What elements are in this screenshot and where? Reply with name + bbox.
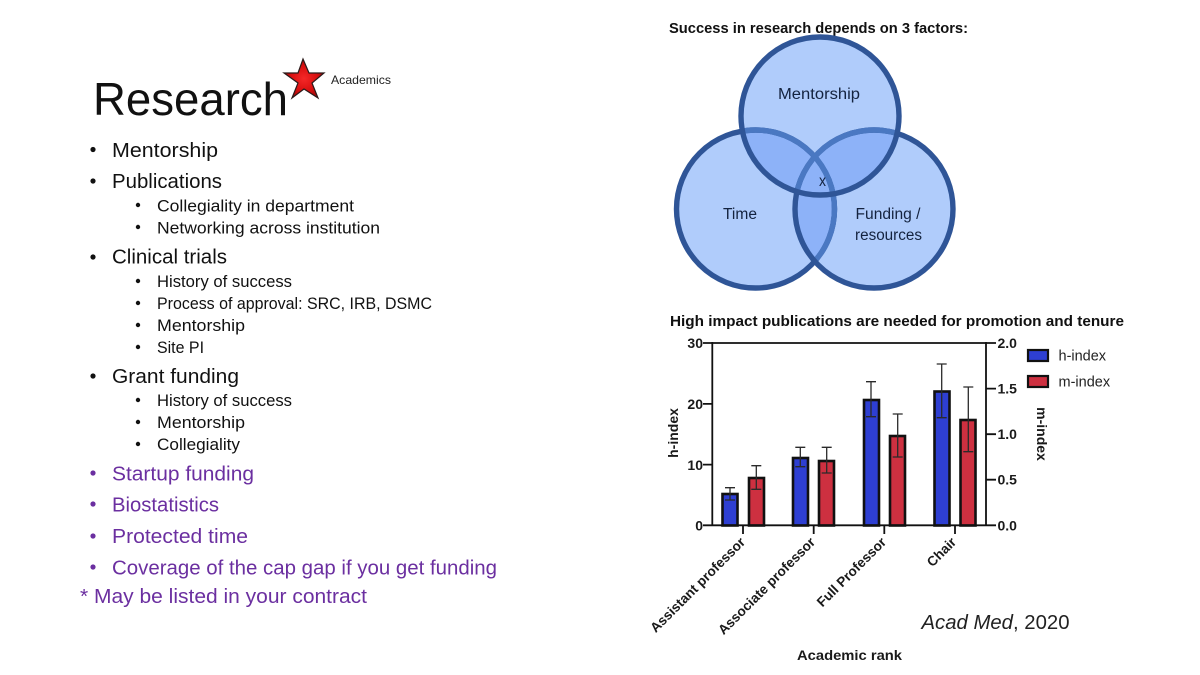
contract items in purple bbox=[80, 464, 497, 608]
bullet: clinical trials: Process of approval: SRC, IRB, DSMC bbox=[157, 295, 432, 313]
label: funding / resources: resources bbox=[855, 227, 922, 244]
category labels: Full Professor bbox=[814, 534, 890, 610]
bullet: grant funding: Grant funding bbox=[112, 366, 239, 388]
right axis labels bbox=[998, 335, 1017, 534]
venn diagram bbox=[676, 37, 953, 288]
heading: chart: High impact publications are needed for promotion and tenure bbox=[670, 313, 1124, 330]
bullet: publications: Networking across institution bbox=[157, 220, 380, 238]
category labels: Associate professor bbox=[715, 534, 819, 638]
right axis labels: 0.0 bbox=[998, 518, 1017, 534]
left axis labels: 20 bbox=[687, 396, 703, 412]
bullet: mentorship: Mentorship bbox=[112, 140, 218, 162]
right axis labels: 2.0 bbox=[998, 335, 1017, 351]
bullet: publications: Collegiality in department bbox=[157, 198, 354, 216]
bullet: publications bbox=[90, 171, 380, 238]
contract items in purple: * May be listed in your contract bbox=[80, 586, 367, 608]
left axis labels bbox=[687, 335, 703, 534]
label: mentorship: Mentorship bbox=[778, 86, 860, 103]
bullet: grant funding: Mentorship bbox=[157, 414, 245, 432]
category labels: Chair bbox=[924, 534, 960, 570]
bullet: grant funding bbox=[90, 366, 292, 454]
label: x: x bbox=[819, 173, 826, 190]
icon: red star bbox=[284, 59, 324, 98]
h-index bars bbox=[722, 392, 950, 526]
left axis labels: 0 bbox=[695, 518, 703, 534]
bullet: clinical trials: Site PI bbox=[157, 339, 204, 357]
error bars bbox=[725, 364, 973, 500]
contract items in purple: Protected time bbox=[112, 526, 248, 548]
bullet: grant funding: Collegiality bbox=[157, 436, 241, 454]
category labels bbox=[647, 534, 960, 638]
y axis title: h-index: h-index bbox=[665, 408, 681, 458]
left axis labels: 10 bbox=[687, 457, 703, 473]
bullet: clinical trials: Mentorship bbox=[157, 317, 245, 335]
subtitle: academics: Academics bbox=[331, 73, 391, 87]
label: time: Time bbox=[723, 206, 757, 223]
axes bbox=[703, 342, 996, 534]
heading: venn: Success in research depends on 3 factors: bbox=[669, 20, 968, 37]
y axis title: m-index: m-index bbox=[1034, 407, 1050, 461]
right axis labels: 0.5 bbox=[998, 472, 1017, 488]
right axis labels: 1.0 bbox=[998, 426, 1017, 442]
contract items in purple: Biostatistics bbox=[112, 494, 219, 516]
legend: h-index bbox=[1058, 348, 1107, 364]
citation: Acad Med, 2020 bbox=[920, 612, 1070, 634]
contract items in purple: Startup funding bbox=[112, 464, 254, 486]
left axis labels: 30 bbox=[687, 335, 703, 351]
contract items in purple: Coverage of the cap gap if you get funding bbox=[112, 558, 497, 580]
legend bbox=[1028, 348, 1111, 390]
bullet: clinical trials bbox=[90, 246, 432, 357]
bullet: clinical trials: History of success bbox=[157, 273, 292, 291]
bullet: clinical trials: Clinical trials bbox=[112, 246, 227, 268]
title: Research bbox=[93, 73, 288, 125]
label: funding / resources: Funding / bbox=[856, 206, 921, 223]
legend: m-index bbox=[1058, 374, 1111, 390]
bullet: grant funding: History of success bbox=[157, 392, 292, 410]
x axis title: Academic rank bbox=[797, 647, 902, 663]
bar chart bbox=[647, 335, 1111, 663]
panel: research list bbox=[80, 59, 497, 608]
bullet: publications: Publications bbox=[112, 171, 222, 193]
m-index bars bbox=[749, 420, 976, 526]
right axis labels: 1.5 bbox=[998, 380, 1017, 396]
label: funding / resources bbox=[855, 206, 922, 244]
category labels: Assistant professor bbox=[647, 534, 749, 635]
